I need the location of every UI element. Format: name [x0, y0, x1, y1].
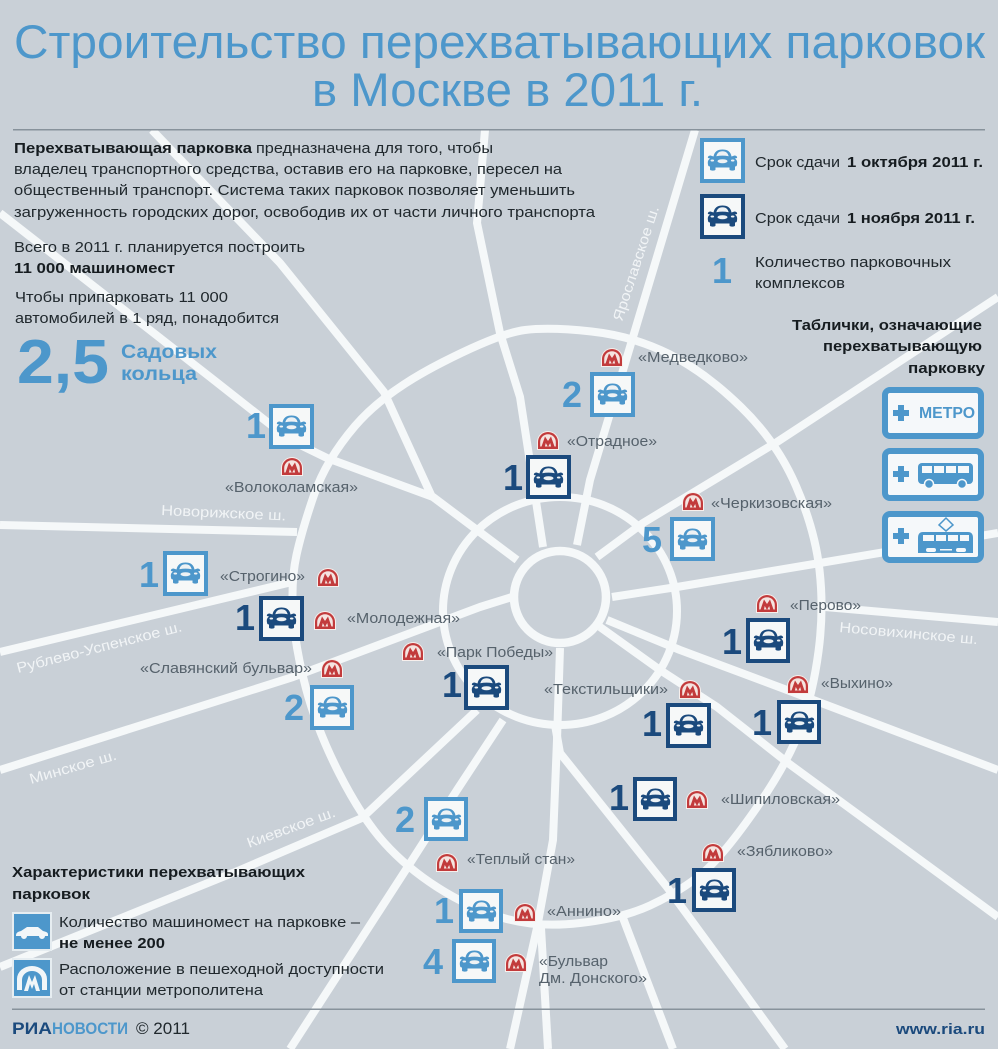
characteristic: location text: Расположение в пешеходной доступности	[59, 961, 384, 978]
station: Tekstilshchiki: «Текстильщики»	[544, 681, 668, 698]
station: Park Pobedy	[402, 642, 553, 708]
plate: metro: МЕТРО	[919, 405, 975, 422]
station: Vykhino: «Выхино»	[821, 675, 893, 692]
comparison text: автомобилей в 1 ряд, понадобится	[15, 310, 279, 327]
station: Annino	[434, 890, 621, 931]
road: Volokolamskoe	[0, 213, 517, 560]
middle ring road	[443, 497, 677, 725]
station: Bulvar Dm. Donskogo: Дм. Донского»	[539, 970, 647, 987]
road labels	[15, 204, 979, 852]
comparison text	[15, 289, 279, 327]
characteristic: capacity text: не менее 200	[59, 935, 165, 952]
legend: count description: Количество парковочных	[755, 254, 951, 271]
legend: November sign	[702, 196, 743, 237]
label: Nosovikhinskoe: Носовихинское ш.	[839, 620, 979, 648]
road: south branch	[541, 928, 548, 1049]
footer: RIA Novosti logo: РИА	[12, 1019, 52, 1038]
road: Novorizhskoe	[0, 525, 297, 532]
plate: metro	[885, 390, 981, 436]
station: Shipilovskaya: 1	[609, 777, 629, 818]
bottom rule	[12, 1008, 985, 1010]
road: northeast	[597, 297, 998, 557]
legend: October sign	[702, 140, 743, 181]
legend: count description: комплексов	[755, 275, 845, 292]
characteristic: location text: от станции метрополитена	[59, 982, 264, 999]
station: Slavyansky Bulvar: «Славянский бульвар»	[140, 660, 312, 677]
title: в Москве в 2011 г.	[312, 63, 703, 116]
station: Volokolamskaya: «Волоколамская»	[225, 479, 358, 496]
footer: RIA Novosti logo	[12, 1019, 128, 1038]
station: Otradnoe: 1	[503, 457, 523, 498]
road: south	[510, 648, 560, 1049]
plate: tram	[885, 514, 981, 560]
icon: metro proximity	[13, 959, 51, 997]
station: Zyablikovo: 1	[667, 870, 687, 911]
footer: website: www.ria.ru	[895, 1021, 985, 1038]
station: Tekstilshchiki	[544, 680, 709, 746]
station: Teply Stan: «Теплый стан»	[467, 851, 575, 868]
station: Annino: 1	[434, 890, 454, 931]
legend: November deadline	[755, 210, 975, 227]
road: southwest	[290, 720, 503, 1049]
station: Shipilovskaya	[609, 777, 840, 819]
station: Medvedkovo: 2	[562, 374, 582, 415]
road: northwest	[152, 130, 432, 497]
road: Nosovikhinskoe	[825, 607, 998, 622]
station: Annino: «Аннино»	[547, 903, 621, 920]
characteristics heading: Характеристики перехватывающих	[12, 864, 306, 881]
station: Strogino: 1	[139, 554, 159, 595]
legend	[702, 140, 983, 292]
station: Cherkizovskaya: 5	[642, 519, 662, 560]
footer: copyright: © 2011	[136, 1019, 190, 1038]
station: Perovo: 1	[722, 621, 742, 662]
station: Otradnoe	[503, 431, 657, 498]
station: Medvedkovo	[562, 348, 748, 415]
intro text block: Перехватывающая парковка	[14, 140, 253, 157]
station: Molodezhnaya	[235, 597, 460, 639]
footer: RIA Novosti logo: НОВОСТИ	[52, 1019, 128, 1038]
station: Slavyansky Bulvar: 2	[284, 687, 304, 728]
station: Molodezhnaya: «Молодежная»	[347, 610, 460, 627]
mask above map	[0, 0, 998, 129]
road: Rublevo-Uspenskoe	[0, 582, 292, 652]
road: north	[477, 130, 543, 547]
characteristics heading	[12, 864, 306, 903]
intro text block: общественный транспорт. Система таких парковок позволяет уменьшить	[14, 182, 575, 199]
station: Perovo	[722, 594, 861, 662]
label: Novorizhskoe: Новорижское ш.	[161, 503, 286, 524]
total spaces text: Всего в 2011 г. планируется построить	[14, 239, 305, 256]
big number: 2,5 Garden Rings: 2,5	[17, 328, 109, 397]
plates heading: перехватывающую	[823, 338, 982, 355]
station: Strogino	[139, 553, 339, 595]
plate: bus	[885, 451, 981, 498]
station: Bulvar Dm. Donskogo	[423, 941, 647, 987]
station: Zyablikovo	[667, 843, 833, 911]
station: Vykhino: 1	[752, 702, 772, 743]
label: Rublevo-Uspenskoe: Рублево-Успенское ш.	[15, 619, 184, 677]
big number: 2,5 Garden Rings	[17, 328, 217, 397]
station: Volokolamskaya: 1	[246, 405, 266, 446]
station: Teply Stan	[395, 799, 575, 872]
legend: October deadline: Срок сдачи	[755, 154, 840, 171]
plates heading	[792, 317, 986, 377]
intro text block: загруженность городских дорог, освободив их от части личного транспорта	[14, 204, 596, 221]
plates heading: парковку	[908, 360, 986, 377]
station: Volokolamskaya	[225, 405, 358, 496]
station: Shipilovskaya: «Шипиловская»	[721, 791, 840, 808]
plates heading: Таблички, означающие	[792, 317, 982, 334]
characteristic: capacity text	[59, 914, 361, 952]
station: Cherkizovskaya	[642, 492, 832, 560]
station: Strogino: «Строгино»	[220, 568, 305, 585]
road: south-southeast	[555, 725, 785, 1049]
station: Slavyansky Bulvar	[140, 659, 352, 728]
title: Строительство перехватывающих парковок	[14, 15, 985, 68]
road: east	[612, 533, 998, 597]
label: Yaroslavskoe: Ярославское ш.	[611, 204, 663, 323]
station: Molodezhnaya: 1	[235, 597, 255, 638]
road: Kievskoe	[0, 710, 477, 967]
station: Otradnoe: «Отрадное»	[567, 433, 657, 450]
title	[14, 15, 985, 116]
intro text block: владелец транспортного средства, оставив его на парковке, пересел на	[14, 161, 563, 178]
road: southeast 1	[607, 620, 998, 770]
station: Perovo: «Перово»	[790, 597, 861, 614]
characteristic: location text	[59, 961, 384, 999]
intro text block: предназначена для того, чтобы	[256, 140, 493, 157]
label: Kievskoe: Киевское ш.	[245, 805, 338, 852]
station: Bulvar Dm. Donskogo: «Бульвар	[539, 953, 608, 970]
outer ring road	[292, 329, 822, 925]
legend: November deadline: 1 ноября 2011 г.	[847, 210, 975, 227]
station: Park Pobedy: «Парк Победы»	[437, 644, 553, 661]
station: Tekstilshchiki: 1	[642, 703, 662, 744]
road: southeast 2	[600, 627, 998, 917]
comparison text: Чтобы припарковать 11 000	[15, 289, 228, 306]
station: Park Pobedy: 1	[442, 664, 462, 705]
characteristic: capacity text: Количество машиномест на парковке –	[59, 914, 361, 931]
characteristics heading: парковок	[12, 886, 90, 903]
road: Minskoe	[0, 597, 512, 770]
big number: 2,5 Garden Rings: Садовых	[121, 341, 217, 363]
legend: count numeral: 1	[712, 250, 732, 291]
inner ring road	[514, 551, 606, 643]
station: Cherkizovskaya: «Черкизовская»	[711, 495, 832, 512]
legend: November deadline: Срок сдачи	[755, 210, 840, 227]
station: Bulvar Dm. Donskogo: 4	[423, 941, 443, 982]
legend: October deadline	[755, 154, 983, 171]
icon: car capacity	[13, 913, 51, 950]
big number: 2,5 Garden Rings: кольца	[121, 363, 197, 385]
road: south branch 2	[623, 918, 673, 1049]
station: Teply Stan: 2	[395, 799, 415, 840]
legend: October deadline: 1 октября 2011 г.	[847, 154, 983, 171]
total spaces text	[14, 239, 305, 277]
station: Zyablikovo: «Зябликово»	[737, 843, 833, 860]
total spaces text: 11 000 машиномест	[14, 260, 176, 277]
intro text block	[14, 140, 596, 221]
station: Medvedkovo: «Медведково»	[638, 349, 748, 366]
legend: count description	[755, 254, 951, 292]
road: Yaroslavskoe	[577, 130, 695, 545]
top rule	[13, 129, 985, 130]
station: Vykhino	[752, 675, 893, 743]
label: Minskoe: Минское ш.	[28, 748, 119, 788]
